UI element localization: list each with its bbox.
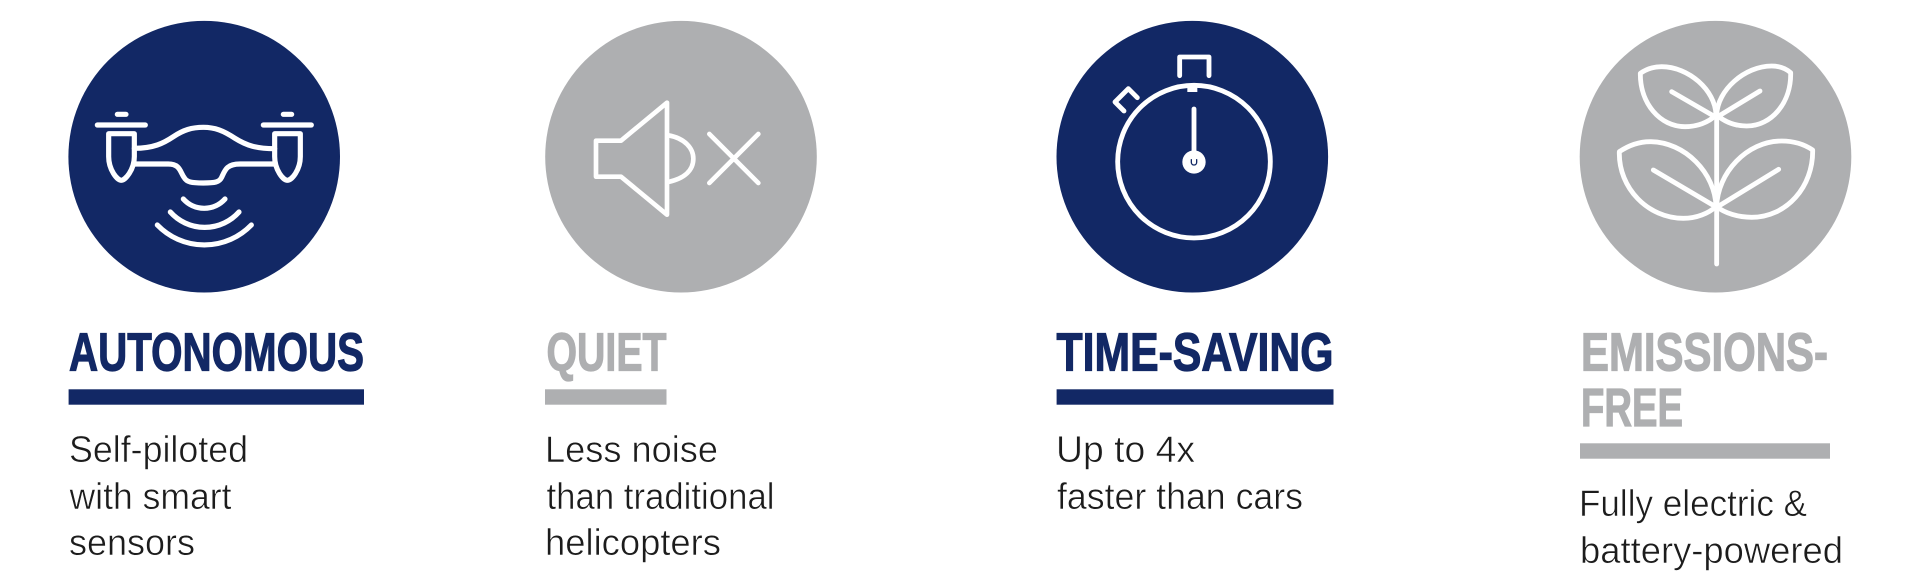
text: quiet description: helicopters bbox=[545, 522, 721, 563]
text: time-saving description bbox=[1056, 429, 1303, 517]
panel: emissions-free bbox=[1579, 21, 1851, 571]
text: time-saving description: faster than cars bbox=[1057, 476, 1303, 517]
icon: drone in navy circle bbox=[68, 21, 340, 292]
bar: time-saving underline bbox=[1057, 389, 1334, 405]
icon: muted speaker in gray circle bbox=[545, 21, 817, 292]
bar: autonomous underline bbox=[69, 389, 364, 405]
text: emissions-free description: battery-powered bbox=[1580, 530, 1843, 571]
heading: emissions-free: EMISSIONS- bbox=[1581, 322, 1828, 382]
text: autonomous description: Self-piloted bbox=[69, 429, 248, 470]
text: autonomous description: with smart bbox=[69, 476, 232, 517]
panel: quiet bbox=[545, 21, 817, 563]
heading: quiet: QUIET bbox=[546, 322, 667, 382]
icon: plant in gray circle bbox=[1580, 21, 1851, 292]
heading: time-saving: TIME-SAVING bbox=[1056, 322, 1334, 382]
text: quiet description: Less noise bbox=[545, 429, 718, 470]
text: emissions-free description bbox=[1579, 483, 1843, 571]
bar: emissions-free underline bbox=[1580, 443, 1830, 459]
panel: autonomous bbox=[68, 21, 364, 563]
text: quiet description: than traditional bbox=[546, 476, 774, 517]
heading: autonomous: AUTONOMOUS bbox=[69, 322, 364, 382]
icon: stopwatch in navy circle bbox=[1056, 21, 1328, 292]
heading: emissions-free bbox=[1581, 322, 1828, 438]
text: autonomous description: sensors bbox=[69, 522, 195, 563]
heading: emissions-free: FREE bbox=[1581, 378, 1683, 438]
bar: quiet underline bbox=[545, 389, 666, 405]
text: autonomous description bbox=[69, 429, 248, 563]
panel: time-saving bbox=[1056, 21, 1334, 517]
text: time-saving description: Up to 4x bbox=[1056, 429, 1195, 470]
text: emissions-free description: Fully electric & bbox=[1579, 483, 1807, 524]
text: quiet description bbox=[545, 429, 774, 563]
